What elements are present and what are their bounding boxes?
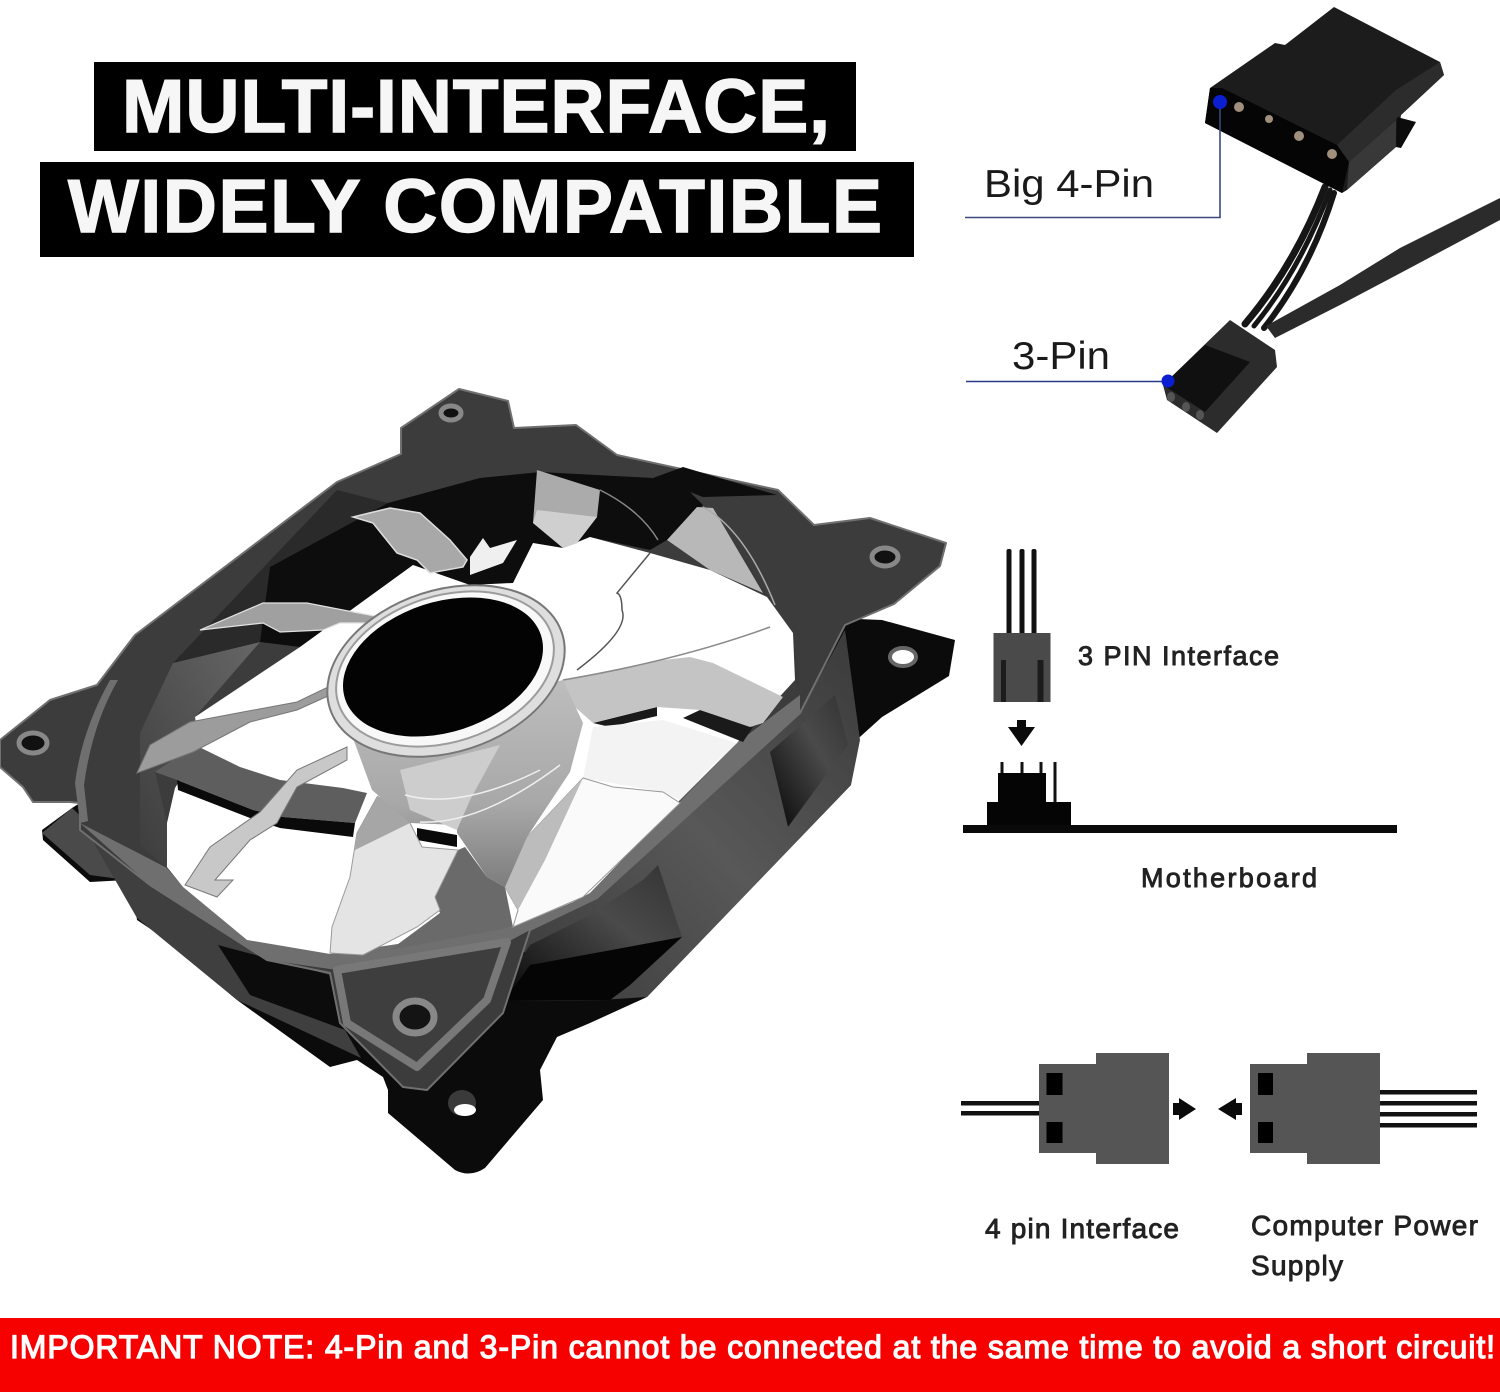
label: motherboard: Motherboard [1141, 863, 1317, 893]
main flat cable [1266, 198, 1500, 338]
left arrow [1218, 1098, 1242, 1120]
fan hub ring [305, 556, 587, 786]
right connector wires [1380, 1090, 1477, 1128]
important note banner: IMPORTANT NOTE: 4-Pin and 3-Pin cannot be connected at the same time to avoid a short circuit! [10, 1329, 1495, 1365]
left connector wires [961, 1101, 1039, 1116]
fan side notch [505, 865, 682, 1002]
3-pin plug [994, 633, 1050, 702]
frame band lower [80, 695, 800, 970]
label: 3 pin interface: 3 PIN Interface [1078, 641, 1279, 671]
callout: big 4-pin: Big 4-Pin [984, 163, 1154, 206]
fan lower-right blade shade [563, 657, 783, 727]
fan corner tab faces [337, 942, 507, 1067]
fan illustration [0, 389, 955, 1174]
fan rear mounting holes [890, 648, 916, 666]
molex front face [1205, 88, 1349, 193]
left band [75, 680, 118, 823]
fan front frame [0, 389, 946, 1090]
fan bottom-right blade [583, 720, 737, 800]
title line 2: WIDELY COMPATIBLE [68, 164, 882, 248]
3-pin plug wires [1006, 549, 1036, 635]
fan hub cap [325, 573, 561, 761]
big 4-pin and 3-pin cable photo [1163, 7, 1500, 433]
left connector [1039, 1053, 1169, 1164]
label: 4 pin interface: 4 pin Interface [985, 1213, 1179, 1244]
title line 1: MULTI-INTERFACE, [122, 64, 830, 148]
down arrow [1008, 720, 1035, 746]
fan floor [390, 847, 513, 950]
rear left tab face [42, 808, 150, 895]
fan corner mounting holes [19, 406, 898, 1033]
fan blade top-left [353, 508, 467, 573]
fan rear frame [42, 600, 955, 1174]
fan blade lower-left curve [137, 687, 328, 773]
fan blade lower centre [330, 770, 458, 955]
fan hub body [350, 680, 583, 887]
fan side wall [505, 630, 860, 1000]
header pins [1000, 762, 1056, 804]
fan upper-right blade grey [667, 507, 763, 593]
molex pins [1234, 102, 1337, 159]
3-pin connector body [1163, 320, 1277, 433]
molex connector body [1205, 7, 1444, 193]
fan inner arc band [155, 745, 367, 823]
fan inner black strip [177, 780, 355, 837]
fan opening wall [140, 642, 260, 868]
right arrow [1173, 1098, 1196, 1120]
motherboard header [987, 773, 1071, 827]
right connector [1250, 1053, 1380, 1164]
fan blade left [200, 603, 380, 632]
fan top blade grey [533, 470, 600, 548]
important note banner [0, 1318, 1500, 1392]
title [40, 62, 914, 257]
3-pin motherboard diagram [963, 549, 1397, 893]
fan blade star highlight [470, 538, 517, 575]
fan hub glass lines [405, 765, 560, 822]
callout: 3-pin [966, 335, 1174, 388]
3-pin holes [1167, 392, 1204, 420]
fan white opening [167, 537, 795, 954]
label: computer power supply [1251, 1210, 1478, 1281]
cable wires [1245, 187, 1334, 328]
fan right wall [703, 507, 800, 690]
fan blade arc [185, 747, 347, 897]
fan top black wall [260, 467, 777, 647]
molex clip [1396, 117, 1416, 148]
fan lower-left side [83, 824, 361, 1058]
label: computer power supply: Computer Power [1251, 1210, 1478, 1241]
4-pin power diagram [961, 1053, 1478, 1281]
callout: 3-pin: 3-Pin [1012, 335, 1110, 378]
motherboard line [963, 825, 1397, 833]
label: computer power supply: Supply [1251, 1250, 1343, 1281]
fan blade lines [563, 490, 775, 680]
callout: big 4-pin [965, 95, 1227, 218]
